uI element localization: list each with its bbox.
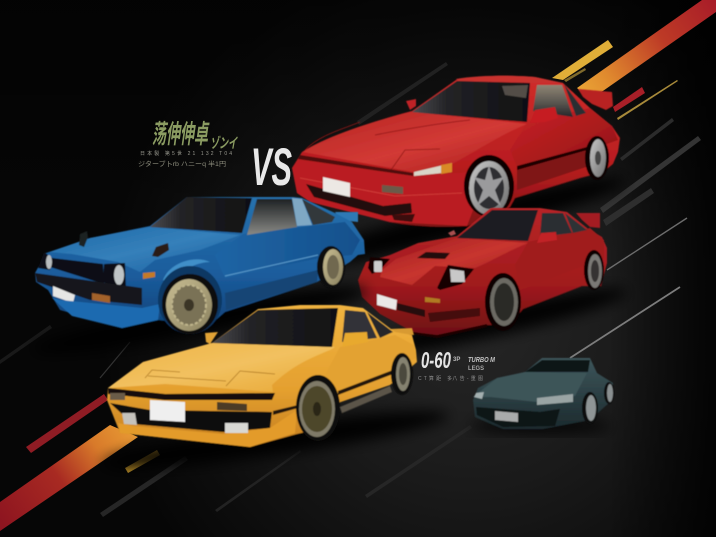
body xyxy=(107,305,417,447)
grille xyxy=(397,303,425,317)
fog light right xyxy=(225,423,248,433)
amber light xyxy=(425,297,440,303)
hood xyxy=(303,112,527,172)
spoiler xyxy=(578,89,613,110)
bumper side stripe xyxy=(273,405,298,415)
sill xyxy=(340,386,392,413)
right headlight surround xyxy=(103,263,126,290)
fog light xyxy=(382,185,403,194)
spoiler xyxy=(576,213,600,228)
hood xyxy=(50,227,240,272)
VS label: VS xyxy=(251,139,292,197)
title: green Japanese heading: ゾンイ xyxy=(209,135,239,152)
left mirror xyxy=(448,230,456,236)
left mirror xyxy=(406,99,416,110)
door panel xyxy=(215,222,360,278)
spoiler xyxy=(390,328,414,335)
grille xyxy=(306,184,412,216)
rear wheel xyxy=(317,246,345,288)
car: dark red pop-up headlight coupe xyxy=(358,208,630,366)
hood panel line xyxy=(145,370,275,386)
rear side window xyxy=(564,84,586,116)
license plate xyxy=(150,400,185,422)
right pop-up headlight xyxy=(437,265,474,290)
car: small dark teal coupe xyxy=(470,358,614,434)
sill xyxy=(225,270,318,310)
side mirror xyxy=(530,107,558,123)
bumper crease xyxy=(300,178,462,196)
roof edge xyxy=(456,76,563,83)
side window xyxy=(540,213,572,237)
side window xyxy=(247,199,297,235)
fog light left xyxy=(122,413,137,425)
headlight xyxy=(537,394,573,405)
wheel arch xyxy=(158,266,222,334)
rear wheel xyxy=(604,382,614,404)
rear side window xyxy=(565,213,587,233)
speed lines: grey streaks xyxy=(100,62,701,498)
chin spoiler xyxy=(52,298,160,328)
shadow xyxy=(100,401,450,479)
spec: 0-60: 0-60 xyxy=(421,348,451,374)
rear side window xyxy=(367,312,393,338)
front wheel xyxy=(296,375,340,441)
license plate xyxy=(377,294,397,310)
windshield xyxy=(457,210,538,241)
front wheel xyxy=(464,155,514,217)
spoiler xyxy=(335,212,358,222)
interior reflection xyxy=(502,85,528,98)
shadow xyxy=(470,418,610,434)
car: large red coupe xyxy=(291,76,629,279)
rear wheel xyxy=(585,136,609,180)
left headlight xyxy=(474,392,484,399)
front wheel xyxy=(582,392,598,424)
body xyxy=(35,197,365,328)
windshield xyxy=(150,197,252,233)
left pop-up headlight xyxy=(368,257,390,274)
license plate xyxy=(53,286,75,303)
hood front line xyxy=(298,155,413,176)
speed stripes: top right xyxy=(552,0,716,120)
front wheel xyxy=(162,274,218,334)
pillar xyxy=(292,198,312,226)
chin slot xyxy=(392,214,415,222)
shadow xyxy=(360,278,630,366)
hood xyxy=(473,372,587,402)
hood xyxy=(380,238,528,285)
hood xyxy=(108,343,335,392)
side mirror xyxy=(537,232,557,243)
amber light xyxy=(441,163,452,174)
bumper chin xyxy=(118,410,297,447)
body xyxy=(358,208,607,336)
mirror right xyxy=(152,243,169,257)
body xyxy=(292,76,620,227)
rear wheel xyxy=(391,353,413,395)
subtitle lines: 日本製 第5世 21 132 T04 xyxy=(140,150,232,157)
black grille xyxy=(110,403,272,432)
light right xyxy=(217,402,247,411)
speed stripes: bottom left xyxy=(0,325,301,531)
sill xyxy=(517,149,592,190)
body xyxy=(473,358,613,429)
shadow xyxy=(291,165,629,279)
lower intake xyxy=(428,308,480,322)
right headlight xyxy=(114,265,124,285)
front bumper upper xyxy=(292,160,480,226)
front wheel xyxy=(485,273,521,331)
left headlight xyxy=(38,252,52,270)
windshield xyxy=(212,308,338,347)
side crease xyxy=(225,255,318,276)
spec: 0-60: LEGS xyxy=(468,366,484,372)
mirror left xyxy=(79,231,88,247)
spec: 0-60: 3P xyxy=(453,357,460,363)
shadow xyxy=(30,276,370,364)
side window xyxy=(342,310,377,342)
windshield xyxy=(412,81,530,122)
side stripes xyxy=(338,370,393,395)
side window xyxy=(533,85,573,117)
side stripe xyxy=(517,147,587,170)
fender highlight xyxy=(163,259,210,285)
black band xyxy=(108,388,275,400)
quarter window xyxy=(302,199,335,225)
light left xyxy=(110,393,125,400)
amber turn signal xyxy=(92,293,110,303)
car: yellow coupe xyxy=(100,305,450,479)
left mirror xyxy=(205,332,218,344)
hood panel lines xyxy=(305,120,470,170)
license plate xyxy=(323,177,350,197)
door panel xyxy=(510,108,618,167)
door panel xyxy=(325,335,416,390)
subtitle lines: ジターブ卜rb ハニーq 半1円 xyxy=(138,159,226,168)
black grille xyxy=(50,258,104,284)
spec: 0-60 xyxy=(418,348,495,382)
car: blue coupe xyxy=(30,197,370,364)
rear wheel xyxy=(584,250,604,290)
subtitle lines xyxy=(138,150,232,168)
spec: 0-60: C T 算 距 多八 告 - 重 图 xyxy=(418,375,483,382)
title: green Japanese heading: 荡伸伸卓 xyxy=(151,120,211,149)
side marker xyxy=(143,272,155,279)
spec: 0-60: TURBO M xyxy=(468,357,495,364)
side mirror xyxy=(342,332,368,347)
door panel xyxy=(515,228,604,290)
license plate xyxy=(495,411,518,422)
windshield xyxy=(525,360,590,372)
hood scoop xyxy=(417,252,450,259)
headlight xyxy=(414,163,452,176)
black front bumper xyxy=(35,273,142,305)
front lip xyxy=(412,324,487,338)
lower grille xyxy=(476,407,560,427)
